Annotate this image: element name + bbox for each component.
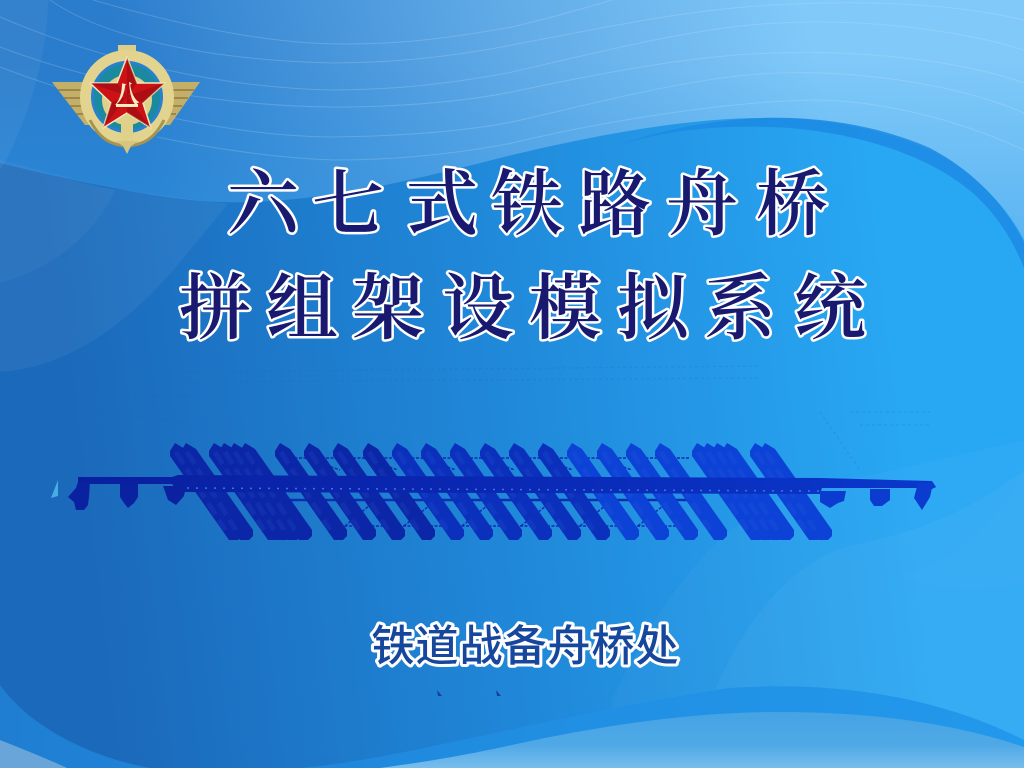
emblem star: 八	[114, 82, 140, 109]
decorative thin curves	[0, 0, 1024, 160]
bottom dark band	[0, 685, 1024, 768]
right pontoons	[567, 443, 832, 540]
emblem star	[90, 57, 165, 128]
left pontoons	[170, 443, 435, 540]
deck supports	[68, 482, 933, 510]
bottom light band	[380, 712, 1024, 768]
title line 2: 拼组架设模拟系统	[179, 269, 868, 349]
pontoon bridge	[68, 443, 936, 540]
bridge deck	[78, 475, 936, 494]
lower right translucent curves	[612, 440, 1024, 768]
title line 1: 六七式铁路舟桥	[227, 165, 828, 245]
small left marker	[51, 480, 58, 498]
bottom left corner	[0, 740, 67, 768]
emblem ring	[86, 45, 168, 146]
upper sky zone	[0, 0, 1024, 240]
emblem	[52, 45, 200, 154]
pontoon cells	[176, 452, 815, 530]
lateral cables	[285, 458, 690, 526]
dark swoosh band	[612, 118, 1024, 268]
left translucent curves	[0, 0, 228, 372]
faint ghost bridge	[85, 366, 930, 470]
emblem anchor	[115, 118, 139, 154]
middle pontoons	[392, 443, 610, 540]
emblem wings	[52, 82, 200, 125]
tiny marks	[437, 690, 501, 696]
subtitle: 铁道战备舟桥处	[372, 623, 678, 671]
